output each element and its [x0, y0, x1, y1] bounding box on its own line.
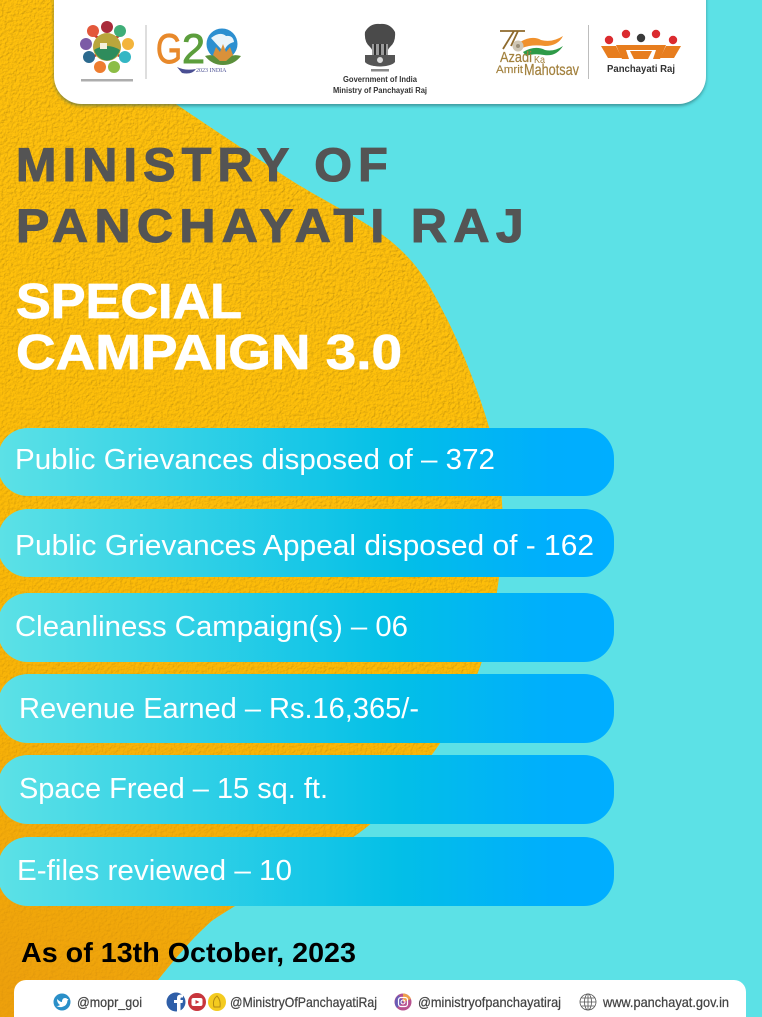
- footer panel: social links: [14, 980, 746, 1017]
- title: Ministry of Panchayati Raj: [16, 138, 530, 252]
- icon: koo: [208, 993, 226, 1011]
- logo: Azadi Ka Amrit Mahotsav: [496, 31, 579, 79]
- title: Ministry of Panchayati Raj: MINISTRY OF: [16, 138, 394, 191]
- stat bar: public grievances appeal: [0, 509, 614, 577]
- logo: G20: 2: [182, 25, 205, 72]
- stat bar: public grievances: [0, 428, 614, 496]
- footer panel: social links: @ministryofpanchayatiraj: [418, 994, 561, 1010]
- stat bar: public grievances: Public Grievances disposed of – 372: [15, 444, 495, 476]
- stat bar: cleanliness campaigns: Cleanliness Campaign(s) – 06: [15, 611, 408, 643]
- icon: twitter: [54, 994, 70, 1010]
- stat bar: revenue earned: Revenue Earned – Rs.16,365/-: [19, 693, 419, 725]
- footer panel: social links: @mopr_goi: [77, 994, 142, 1010]
- stat bar: revenue earned: [0, 674, 614, 743]
- logo: G20: 2023 INDIA: [196, 68, 227, 74]
- background: textured yellow shape: [0, 0, 520, 1017]
- ministry caption: Government of India: [343, 75, 418, 84]
- logo: G20: G: [156, 25, 182, 72]
- logo: national emblem: [333, 24, 427, 95]
- title: Ministry of Panchayati Raj: PANCHAYATI RAJ: [16, 199, 530, 252]
- logo: Azadi Ka Amrit Mahotsav: Amrit: [496, 64, 523, 76]
- stat bar: e-files reviewed: E-files reviewed – 10: [17, 855, 292, 887]
- stat bar: space freed: [0, 755, 614, 824]
- ministry caption: [333, 75, 427, 95]
- heading: Special Campaign 3.0: CAMPAIGN 3.0: [16, 326, 402, 380]
- logo: G20: [156, 25, 241, 74]
- logo caption: tiny tagline: [81, 79, 133, 82]
- heading: Special Campaign 3.0: [16, 275, 402, 380]
- logo: Azadi Ka Amrit Mahotsav: Azadi: [500, 49, 532, 66]
- logo: rural development wheel: [80, 21, 134, 82]
- header panel with logos: [54, 0, 706, 104]
- stat bar: cleanliness campaigns: [0, 593, 614, 662]
- footer panel: social links: www.panchayat.gov.in: [602, 994, 729, 1010]
- logo: Azadi Ka Amrit Mahotsav: Mahotsav: [524, 62, 579, 79]
- footer panel: social links: @MinistryOfPanchayatiRaj: [230, 994, 377, 1010]
- heading: Special Campaign 3.0: SPECIAL: [16, 275, 242, 329]
- divider: [146, 25, 147, 79]
- stat bar: e-files reviewed: [0, 837, 614, 906]
- ministry caption: Ministry of Panchayati Raj: [333, 86, 427, 95]
- logo: Azadi Ka Amrit Mahotsav: Ka: [534, 54, 545, 66]
- date note: As of 13th October, 2023: [21, 937, 356, 968]
- divider: [588, 25, 589, 79]
- stat bar: space freed: Space Freed – 15 sq. ft.: [19, 773, 328, 805]
- icon: youtube: [188, 993, 206, 1011]
- stat bar: public grievances appeal: Public Grievances Appeal disposed of - 162: [15, 530, 594, 562]
- logo: Panchayati Raj: [601, 30, 681, 75]
- icon: facebook: [166, 992, 186, 1012]
- icon: instagram: [394, 993, 412, 1010]
- icon: globe: [580, 994, 596, 1010]
- logo: Panchayati Raj: Panchayati Raj: [607, 63, 675, 75]
